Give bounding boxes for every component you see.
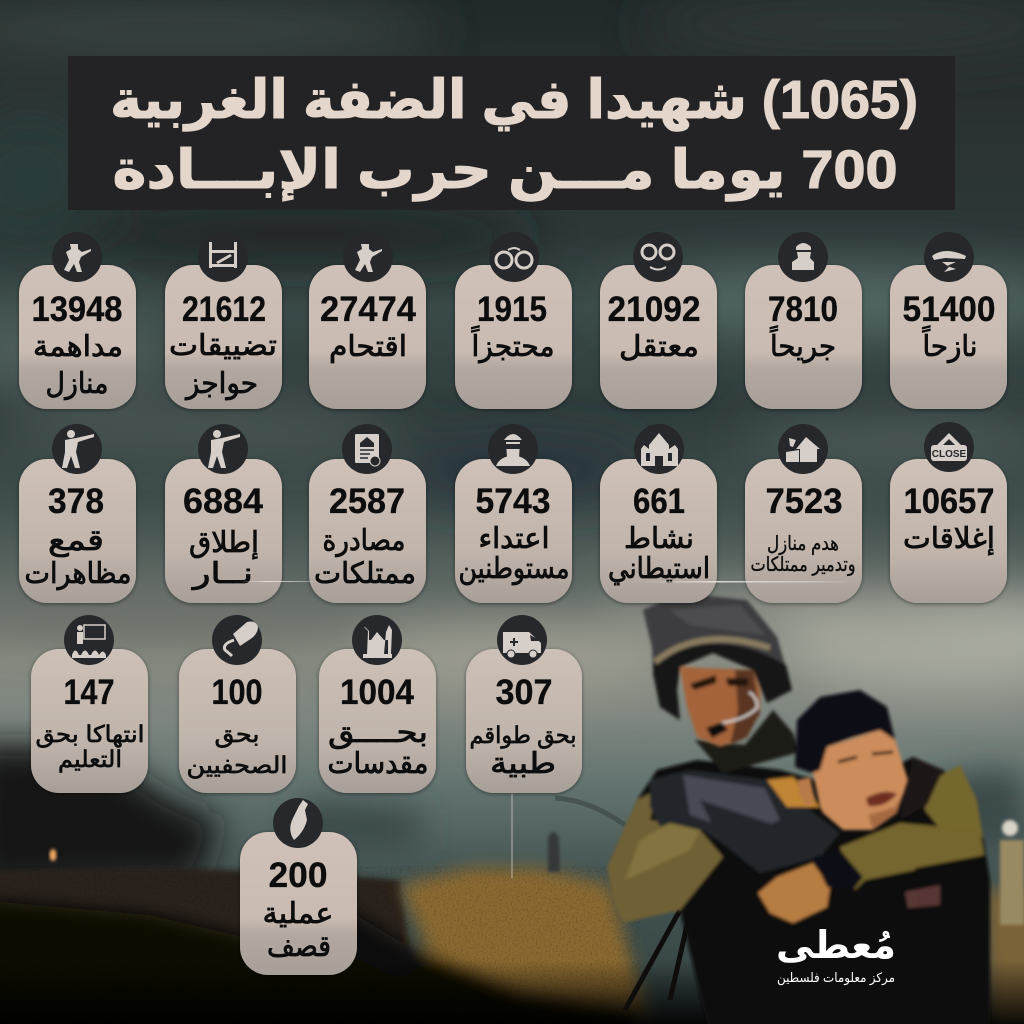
card: demolition [745, 424, 862, 603]
card: wounded [745, 232, 862, 409]
left arm [607, 790, 723, 923]
card: closures: 10657 [904, 482, 994, 521]
icon: settler [488, 424, 538, 474]
card: settlement activity [600, 424, 717, 603]
icon: armed soldier [343, 232, 393, 282]
card: held: 1915 [477, 290, 547, 329]
card: closures: إغلاقات [903, 523, 995, 556]
icon: shooter with rifle [52, 424, 102, 474]
card: shootings: إطلاق [189, 527, 259, 560]
icon: mosque [352, 615, 402, 665]
card: education: 147 [64, 673, 114, 712]
icon: ambulance [497, 615, 547, 665]
icon: close sign: CLOSE [932, 449, 967, 460]
card: incursion: 27474 [320, 290, 417, 329]
card: education [31, 615, 148, 793]
card: medical crews: طبية [490, 748, 556, 780]
card: suppressing demonstrations: قمع [48, 525, 104, 557]
soldier body [607, 710, 990, 1024]
icon: missile [273, 798, 323, 848]
photo: soldier restraining a boy [607, 593, 990, 1024]
icon: document with check [342, 424, 392, 474]
boy's hand on shoulder [767, 777, 820, 807]
card: education: انتهاكا بحق [36, 721, 144, 748]
forearm [840, 823, 985, 890]
card: checkpoint restrictions: حواجز [184, 368, 258, 400]
card: wounded: جريحاً [770, 326, 836, 363]
card: holy sites [319, 615, 436, 793]
card: medical crews: 307 [496, 673, 552, 712]
card: incursion: اقتحام [329, 331, 407, 363]
card: home raids: 13948 [32, 290, 122, 329]
card: displaced [890, 232, 1007, 409]
card: held: محتجزاً [471, 326, 554, 363]
card: holy sites: بحــــق [328, 717, 428, 749]
icon: demolished house [778, 424, 828, 474]
card: bombing: 200 [268, 856, 328, 895]
card: shootings: 6884 [183, 482, 264, 521]
background person, right edge [1000, 820, 1024, 925]
card: suppressing demonstrations: مظاهرات [24, 558, 132, 590]
icon: close sign [924, 422, 974, 472]
card: settlement activity: استيطاني [608, 553, 710, 586]
icon: shooter with rifle [198, 424, 248, 474]
title line 1: (1065) شهيدا في الضفة الغربية [110, 70, 918, 131]
card: settlement activity: نشاط [624, 523, 694, 555]
icon: lying person [924, 232, 974, 282]
card: suppressing demonstrations: 378 [48, 482, 104, 521]
right shoulder [925, 765, 983, 837]
card: settler attacks [455, 424, 572, 603]
collar [695, 710, 800, 773]
card: property confiscation: ممتلكات [314, 558, 416, 590]
card: detainees: معتقل [619, 331, 699, 363]
card: settlement activity: 661 [633, 482, 685, 521]
card: closures [890, 422, 1007, 603]
card: checkpoint restrictions: 21612 [182, 290, 266, 329]
card: detainees: 21092 [608, 290, 700, 329]
card: journalists: الصحفيين [186, 752, 288, 779]
icon: microphone [212, 615, 262, 665]
card: bombing: عملية [262, 898, 334, 930]
card: education: التعليم [58, 746, 122, 773]
logo: Maati [776, 925, 896, 986]
icon: armed soldier [52, 232, 102, 282]
card: holy sites: مقدسات [328, 748, 428, 780]
card: displaced: 51400 [902, 290, 996, 329]
card: demolition: هدم منازل [767, 533, 839, 555]
card: demolition: وتدمير ممتلكات [750, 554, 856, 576]
card: bombing [240, 798, 357, 975]
card: property confiscation [309, 424, 426, 603]
card: property confiscation: 2587 [329, 482, 405, 521]
icon: barrier [198, 232, 248, 282]
card: held [455, 232, 572, 409]
card: home raids: منازل [46, 368, 108, 400]
card: settler attacks: 5743 [476, 482, 550, 521]
logo: Maati: مُعطى [776, 925, 896, 967]
ground [0, 868, 420, 1024]
icon: bandaged person [778, 232, 828, 282]
card: shootings [165, 424, 282, 603]
card: incursion [309, 232, 426, 409]
title line 2: 700 يوما مـــن حرب الإبـــادة [112, 140, 898, 201]
soldier head and helmet [643, 593, 792, 747]
title panel [68, 56, 955, 210]
card: holy sites: 1004 [340, 673, 414, 712]
card: shootings: نــار [190, 558, 253, 590]
card: wounded: 7810 [768, 290, 838, 329]
fist and watch [758, 863, 830, 923]
card: journalists: 100 [212, 673, 262, 712]
card: property confiscation: مصادرة [322, 525, 406, 557]
icon: handcuffs [633, 232, 683, 282]
card: settler attacks: اعتداء [478, 523, 550, 555]
card: medical crews [466, 615, 582, 793]
distant tree line [0, 745, 1024, 890]
decorative light streak across cards [640, 581, 855, 582]
icon: building with star [634, 424, 684, 474]
icon: cuffs [489, 232, 539, 282]
boy head [795, 690, 908, 830]
boy's dark shirt [650, 770, 840, 873]
card: bombing: قصف [267, 931, 331, 963]
card: settler attacks: مستوطنين [458, 553, 570, 585]
logo subtitle: مركز معلومات فلسطين [777, 970, 895, 986]
card: displaced: نازحاً [922, 326, 978, 363]
icon: classroom [64, 615, 114, 665]
card: medical crews: بحق طواقم [470, 722, 576, 749]
card: checkpoint restrictions [165, 232, 282, 409]
card: home raids: مداهمة [33, 331, 123, 363]
card: detainees [600, 232, 717, 409]
card: demolition: 7523 [766, 482, 842, 521]
card: suppressing demonstrations [19, 424, 136, 603]
card: journalists: بحق [214, 721, 260, 748]
card: journalists [179, 615, 296, 793]
card: checkpoint restrictions: تضييقات [169, 330, 277, 362]
ground rods [625, 910, 690, 1010]
card: home raids [19, 232, 136, 409]
